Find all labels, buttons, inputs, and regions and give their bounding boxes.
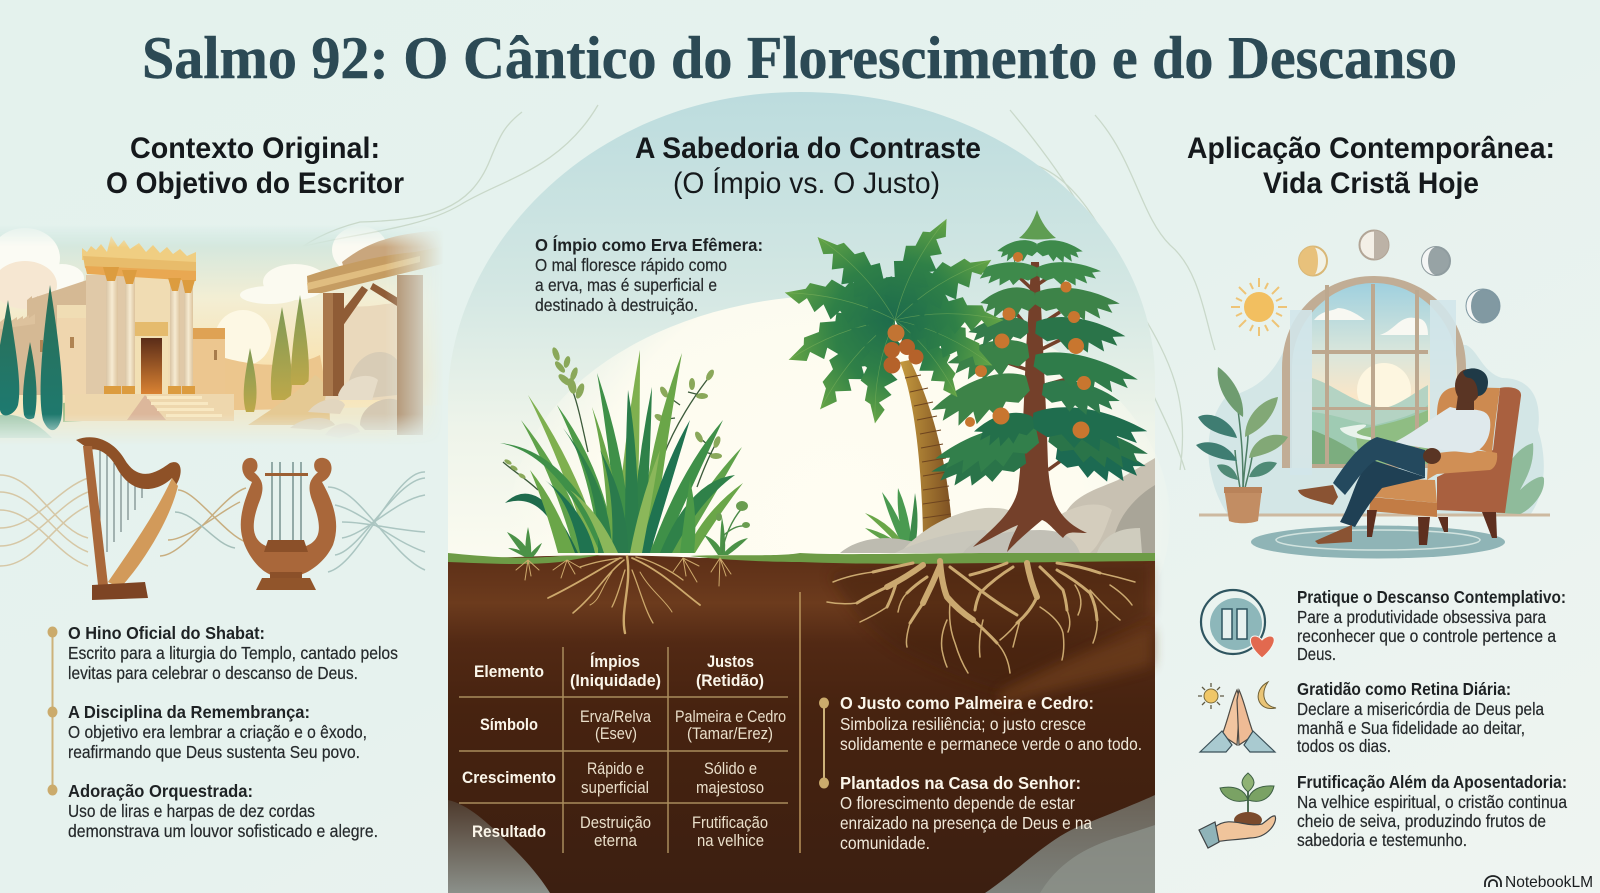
moon phases — [1299, 230, 1500, 322]
NotebookLM logo: NotebookLM — [1505, 874, 1593, 891]
item: plantados: O florescimento depende de estar — [840, 793, 1075, 813]
sun disc — [215, 310, 271, 366]
table row: símbolo: (Tamar/Erez) — [687, 725, 773, 743]
text — [1297, 679, 1544, 756]
item: disciplina: A Disciplina da Remembrança: — [68, 702, 310, 722]
view: sun and hills — [1312, 363, 1428, 465]
panel: center arch — [448, 92, 1170, 893]
rocks bottom left — [448, 800, 550, 893]
text: manhã e Sua fidelidade ao deitar, — [1297, 718, 1525, 738]
table grid — [459, 647, 788, 853]
clouds — [0, 229, 385, 304]
item: palmeira e cedro — [840, 693, 1142, 754]
table row: crescimento — [462, 760, 764, 797]
temple — [82, 236, 196, 400]
coconuts — [884, 324, 924, 374]
illustration: grass with shallow roots — [500, 346, 750, 633]
illustration: ground tuft — [865, 488, 918, 548]
person — [1298, 368, 1490, 544]
illustration: temple scene — [0, 225, 450, 445]
icon: lyre — [241, 458, 336, 590]
heading: aplicação contemporânea — [1187, 132, 1555, 200]
text: Deus. — [1297, 644, 1336, 664]
item: palmeira e cedro: O Justo como Palmeira e Cedro: — [840, 693, 1094, 713]
item: disciplina: reafirmando que Deus sustenta Seu povo. — [68, 742, 360, 762]
table header row — [474, 652, 764, 690]
heading: sabedoria do contraste — [635, 132, 981, 200]
text: Pare a produtividade obsessiva para — [1297, 607, 1546, 627]
table header row: Justos — [707, 652, 754, 671]
under leg — [1340, 460, 1425, 527]
item: disciplina — [68, 702, 367, 762]
head — [1455, 369, 1481, 403]
illustration: palm trunk — [900, 360, 952, 537]
fortress wall — [0, 280, 87, 395]
palm fronds — [783, 209, 1004, 425]
item: adoração: demonstrava um louvor sofisticado e alegre. — [68, 821, 378, 841]
grass band — [448, 552, 1155, 564]
item: plantados — [840, 773, 1092, 853]
rocks bottom right — [985, 795, 1155, 893]
illustration: back rocks — [1060, 458, 1155, 553]
hair — [1463, 368, 1488, 396]
item: descanso — [1201, 587, 1566, 664]
text: reconhecer que o controle pertence a — [1297, 626, 1556, 646]
table header row: (Retidão) — [696, 671, 764, 690]
item: palmeira e cedro: Simboliza resiliência; o justo cresce — [840, 714, 1086, 734]
heading: contexto original — [106, 132, 404, 200]
item: frutificação — [1199, 772, 1567, 850]
shoes — [1298, 485, 1338, 505]
item: hino — [68, 623, 398, 683]
pot — [1224, 488, 1262, 523]
item: plantados: comunidade. — [840, 833, 930, 853]
hand — [1423, 448, 1441, 464]
bullet list: justo — [819, 693, 1142, 853]
text: Na velhice espiritual, o cristão continua — [1297, 792, 1567, 812]
table row: símbolo — [480, 708, 786, 743]
arch sky — [448, 92, 1155, 893]
dark root zone — [830, 563, 1150, 690]
table row: símbolo: Palmeira e Cedro — [675, 708, 786, 726]
text: Frutificação Além da Aposentadoria: — [1297, 772, 1567, 792]
sprigs — [503, 346, 722, 490]
shallow roots — [516, 556, 731, 633]
illustration: wave patterns — [0, 472, 425, 572]
potted plant — [1196, 367, 1288, 523]
ground — [234, 408, 368, 414]
decorative flowing lines — [225, 105, 1215, 470]
rug — [1251, 526, 1505, 558]
item: plantados: Plantados na Casa do Senhor: — [840, 773, 1081, 793]
text block: o ímpio: O mal floresce rápido como — [535, 255, 727, 275]
table row: resultado: Destruição — [580, 814, 651, 832]
table row: crescimento: superficial — [581, 779, 649, 797]
table row: crescimento: Sólido e — [704, 760, 757, 778]
text block: o ímpio — [535, 234, 763, 315]
item: gratidão — [1198, 679, 1544, 756]
columns — [108, 278, 118, 386]
heading: contexto original: Contexto Original: — [130, 132, 380, 165]
backdrop blob — [1208, 345, 1544, 515]
illustration: cedar tree — [927, 210, 1150, 552]
sun glow — [510, 295, 1170, 745]
text: Gratidão como Retina Diária: — [1297, 679, 1511, 699]
table row: resultado: na velhice — [697, 832, 764, 850]
grass blades — [500, 350, 743, 553]
icon: pause with heart — [1201, 590, 1274, 658]
item: hino: levitas para celebrar o descanso de Deus. — [68, 663, 358, 683]
heading: contexto original: O Objetivo do Escritor — [106, 167, 404, 200]
table header row: Ímpios — [590, 652, 640, 671]
table row: crescimento: Rápido e — [587, 760, 644, 778]
text: cheio de seiva, produzindo frutos de — [1297, 811, 1546, 831]
heading: aplicação contemporânea: Aplicação Contemporânea: — [1187, 132, 1555, 165]
heading: aplicação contemporânea: Vida Cristã Hoje — [1263, 167, 1479, 200]
list: aplicação — [1198, 587, 1567, 850]
divider beside table — [799, 592, 801, 853]
text — [1297, 772, 1567, 850]
cedar boughs — [927, 210, 1150, 491]
bullet list: contexto — [48, 623, 398, 841]
text: sabedoria e testemunho. — [1297, 830, 1467, 850]
window — [1282, 276, 1466, 475]
illustration: front rocks — [840, 508, 1142, 553]
heading: sabedoria do contraste: (O Ímpio vs. O Justo) — [673, 167, 940, 200]
table row: resultado: Resultado — [472, 822, 546, 841]
table row: resultado: Frutificação — [692, 814, 768, 832]
text — [1297, 587, 1566, 664]
item: adoração: Uso de liras e harpas de dez cordas — [68, 801, 315, 821]
curtains — [1290, 310, 1312, 475]
item: hino: O Hino Oficial do Shabat: — [68, 623, 265, 643]
distant cypress — [244, 295, 309, 412]
upper leg — [1333, 437, 1425, 495]
wooden gate — [307, 230, 450, 435]
lighter soil hill — [1000, 628, 1152, 705]
heading: sabedoria do contraste: A Sabedoria do Contraste — [635, 132, 981, 165]
text block: o ímpio: O Ímpio como Erva Efêmera: — [535, 234, 763, 255]
window clouds — [1314, 308, 1428, 335]
icon: harp — [76, 437, 181, 600]
capitals — [103, 267, 195, 395]
item: plantados: enraizado na presença de Deus e na — [840, 813, 1092, 833]
text: Declare a misericórdia de Deus pela — [1297, 699, 1544, 719]
item: disciplina: O objetivo era lembrar a criação e o êxodo, — [68, 722, 367, 742]
ground rocks and hills — [248, 304, 400, 425]
base and steps — [65, 394, 234, 421]
sun — [1231, 278, 1287, 336]
cypress trees — [0, 285, 63, 430]
cedar branches — [1005, 275, 1070, 470]
armchair — [1367, 387, 1521, 545]
small side plants — [507, 501, 750, 557]
illustration: deep roots — [827, 561, 1135, 673]
icon: seedling in hand — [1199, 773, 1276, 848]
table row: crescimento: majestoso — [696, 779, 764, 797]
scene sky — [0, 232, 436, 415]
text: Pratique o Descanso Contemplativo: — [1297, 587, 1566, 607]
item: hino: Escrito para a liturgia do Templo, cantado pelos — [68, 643, 398, 663]
floor line — [1199, 514, 1550, 516]
comparison table — [459, 647, 788, 853]
text block: o ímpio: a erva, mas é superficial e — [535, 275, 717, 295]
timeline — [819, 698, 829, 788]
illustration: resting person — [1196, 230, 1550, 558]
small tower — [193, 328, 225, 395]
frame bars — [1312, 284, 1428, 468]
neck — [1456, 395, 1474, 410]
table row: crescimento: Crescimento — [462, 768, 556, 787]
table header row: Elemento — [474, 662, 544, 681]
table row: resultado — [472, 814, 768, 850]
text block: o ímpio: destinado à destruição. — [535, 295, 698, 315]
sweater — [1393, 407, 1490, 453]
doorway — [135, 386, 168, 394]
cedar trunk — [973, 262, 1087, 552]
item: adoração: Adoração Orquestrada: — [68, 781, 253, 801]
text: todos os dias. — [1297, 736, 1391, 756]
icon: praying hands, sun and moon — [1198, 682, 1276, 752]
illustration: palm crown — [783, 209, 1004, 425]
item: palmeira e cedro: solidamente e permanece verde o ano todo. — [840, 734, 1142, 754]
table row: símbolo: Erva/Relva — [580, 708, 652, 726]
cedar fruit — [965, 252, 1091, 438]
table header row: (Iniquidade) — [570, 671, 661, 690]
hills — [225, 355, 330, 410]
table row: resultado: eterna — [594, 832, 638, 850]
side plant — [1497, 443, 1544, 514]
rocks by gate — [290, 352, 397, 438]
table row: símbolo: (Esev) — [595, 725, 637, 743]
soil — [448, 555, 1155, 893]
title: Salmo 92: O Cântico do Florescimento e do Descanso — [142, 25, 1457, 91]
timeline — [48, 626, 58, 796]
item: adoração — [68, 781, 378, 841]
table row: símbolo: Símbolo — [480, 715, 538, 734]
